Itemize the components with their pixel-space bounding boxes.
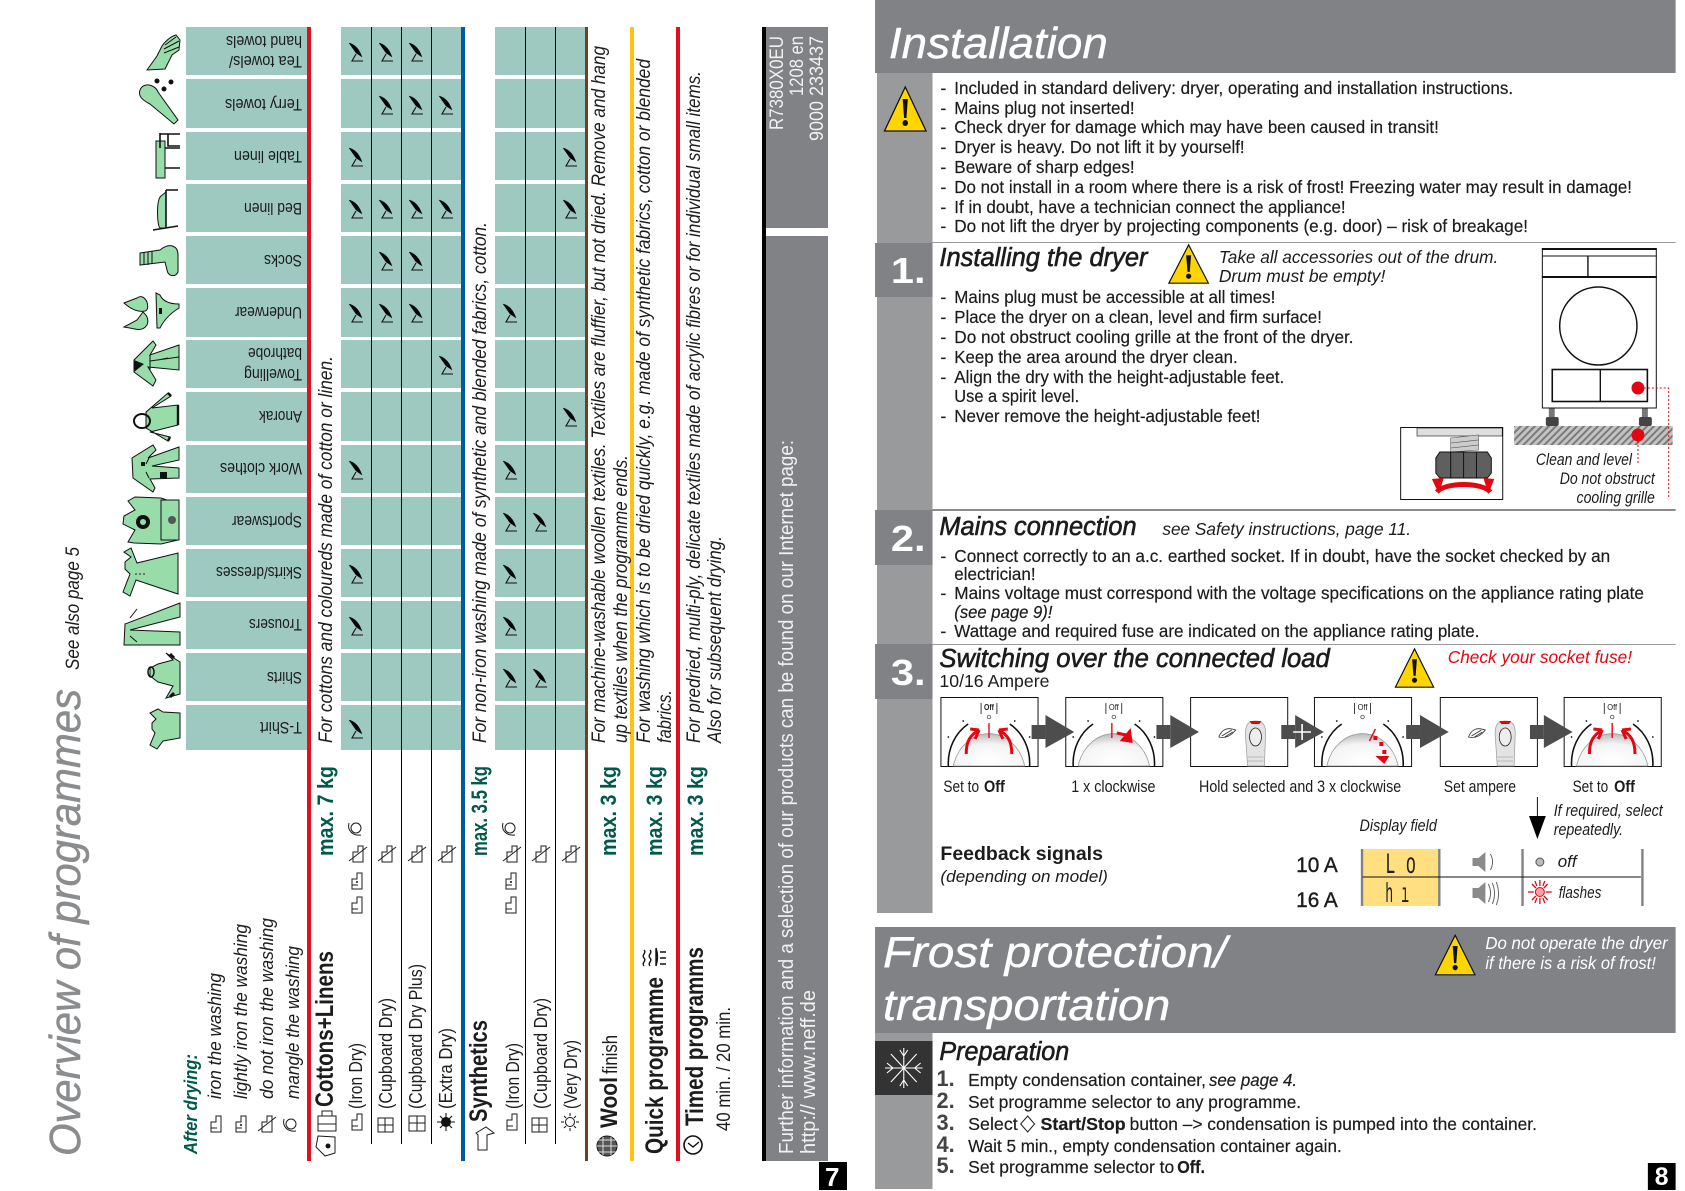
section 1: installing the dryer: Place the dryer on a clean, level and firm surface! bbox=[954, 307, 1322, 327]
heading: frost protection / transportation: transportation bbox=[883, 981, 1170, 1030]
step 3: hold selected bbox=[1191, 698, 1288, 766]
sidebar: grey margin strips bbox=[875, 73, 1676, 1189]
programme: wool finish: finish bbox=[600, 1035, 622, 1074]
section: preparation steps: Off. bbox=[1177, 1157, 1205, 1177]
list: general installation notes: - bbox=[940, 117, 946, 137]
captions: step labels bbox=[943, 777, 1635, 796]
section 3: switching over the connected load: Switching over the connected load bbox=[939, 645, 1331, 673]
section 2: mains connection: 2. bbox=[891, 519, 926, 559]
section 2: mains connection: see Safety instructions, page 11. bbox=[1162, 519, 1411, 539]
icon: wool ball bbox=[597, 1136, 617, 1156]
step 2: one click clockwise: Off bbox=[1109, 703, 1120, 712]
table: fabric labels column: Bed linen bbox=[244, 199, 302, 218]
heading: installation bbox=[875, 0, 1676, 73]
list: general installation notes: If in doubt, have a technician connect the appliance! bbox=[954, 197, 1346, 217]
diagram: adjustable foot detail bbox=[1401, 428, 1503, 500]
section: preparation steps: see page 4. bbox=[1209, 1070, 1297, 1090]
icons: garment row pictograms bbox=[123, 35, 180, 749]
programme: synthetics: max. 3.5 kg bbox=[467, 766, 492, 856]
heading: frost protection / transportation bbox=[875, 927, 1676, 1033]
programme: wool finish bbox=[589, 46, 632, 1156]
page number 8: 8 bbox=[1655, 1163, 1669, 1191]
captions: step labels: Set ampere bbox=[1444, 777, 1516, 796]
programme: quick programme: fabrics. bbox=[655, 690, 676, 743]
programme: timed programms: Timed programms bbox=[681, 947, 709, 1126]
heading: frost protection / transportation: Frost protection/ bbox=[883, 928, 1231, 977]
list: general installation notes: - bbox=[940, 98, 946, 118]
table: fabric labels column: bathrobe bbox=[248, 344, 302, 363]
section: preparation steps: 3. bbox=[936, 1110, 955, 1135]
heading: installation: Installation bbox=[889, 19, 1108, 68]
icon: clock bbox=[684, 1136, 702, 1154]
programme: cottons and linens: Cottons+Linens bbox=[311, 951, 339, 1107]
arrow: if required, select repeatedly: If required, select bbox=[1554, 801, 1664, 820]
diagram labels: clean and level, cooling grille bbox=[1536, 450, 1656, 507]
panel: further information footer: http:// www.neff.de bbox=[798, 990, 820, 1154]
section 3: switching over the connected load: 10/16 Ampere bbox=[939, 671, 1049, 691]
programme: synthetics: (Iron Dry) bbox=[503, 1043, 523, 1109]
step 6: set to off bbox=[1564, 698, 1661, 766]
section 1: installing the dryer: Drum must be empty! bbox=[1219, 266, 1385, 286]
section 3: switching over the connected load bbox=[891, 645, 1632, 693]
captions: step labels: Set to bbox=[943, 777, 979, 796]
title: overview of programmes: Overview of programmes bbox=[41, 689, 90, 1156]
section 1: installing the dryer: 1. bbox=[891, 251, 926, 291]
list: general installation notes: - bbox=[940, 216, 946, 236]
section: preparation steps: 5. bbox=[936, 1153, 955, 1178]
captions: step labels: Hold selected and 3 x clockwise bbox=[1199, 777, 1401, 796]
programme: cottons and linens: (Extra Dry) bbox=[436, 1028, 456, 1109]
diagram labels: clean and level, cooling grille: Do not obstruct bbox=[1560, 469, 1656, 488]
section: preparation steps: 4. bbox=[936, 1132, 955, 1157]
table: cottons and linens checks bbox=[341, 27, 461, 1144]
indicator: off: off bbox=[1558, 852, 1579, 871]
section 3: switching over the connected load: 3. bbox=[891, 653, 926, 693]
table: fabric labels column: Anorak bbox=[259, 407, 302, 426]
list: general installation notes: - bbox=[940, 157, 946, 177]
section: preparation steps: Empty condensation container, bbox=[968, 1070, 1206, 1090]
legend: after drying: do not iron the washing bbox=[257, 918, 277, 1099]
heading: frost protection / transportation: Do not operate the dryer bbox=[1485, 933, 1669, 953]
arrows between step panels bbox=[1032, 715, 1573, 748]
section 1: installing the dryer: Never remove the height-adjustable feet! bbox=[954, 406, 1260, 426]
indicator: flashes bbox=[1528, 880, 1602, 904]
step 2: one click clockwise bbox=[1066, 698, 1163, 766]
programme: synthetics: Synthetics bbox=[465, 1020, 493, 1122]
section 2: mains connection: (see page 9)! bbox=[954, 602, 1052, 622]
programme: cottons and linens: (Cupboard Dry) bbox=[376, 998, 396, 1109]
programme: timed programms bbox=[681, 71, 735, 1154]
legend: after drying: mangle the washing bbox=[283, 946, 303, 1099]
list: general installation notes: Dryer is heavy. Do not lift it by yourself! bbox=[954, 137, 1245, 157]
section 1: installing the dryer: - bbox=[940, 406, 946, 426]
text: feedback signals: Feedback signals bbox=[940, 844, 1103, 865]
step 4: three clicks clockwise: Off bbox=[1358, 703, 1368, 712]
table: fabric labels column: Sportswear bbox=[232, 512, 302, 531]
list: general installation notes: - bbox=[940, 197, 946, 217]
step 1: set to off: Off bbox=[984, 703, 994, 712]
table: fabric labels column: Shirts bbox=[267, 668, 302, 687]
text: feedback signals: (depending on model) bbox=[940, 867, 1108, 886]
section 1: installing the dryer: Align the dry with the height-adjustable feet. bbox=[954, 367, 1284, 387]
panel: overview of programmes (left page) bbox=[41, 27, 847, 1191]
text: feedback signals bbox=[940, 844, 1108, 886]
diagram labels: clean and level, cooling grille: cooling grille bbox=[1577, 488, 1655, 507]
step 1: set to off bbox=[941, 698, 1038, 766]
list: general installation notes: Beware of sharp edges! bbox=[954, 157, 1135, 177]
indicator: flashes: flashes bbox=[1559, 883, 1602, 902]
legend: after drying bbox=[181, 918, 303, 1155]
captions: step labels: Off bbox=[984, 777, 1005, 796]
table: feedback signals display bbox=[1296, 816, 1642, 912]
section 3: switching over the connected load: Check your socket fuse! bbox=[1448, 647, 1632, 667]
section 1: installing the dryer: - bbox=[940, 287, 946, 307]
icon: quick steam bbox=[643, 948, 666, 966]
section 2: mains connection: electrician! bbox=[954, 564, 1036, 584]
icon: cottons basket bbox=[316, 1111, 336, 1156]
legend: after drying: After drying: bbox=[181, 1054, 201, 1155]
diagram: dryer front view bbox=[1514, 249, 1673, 498]
section: preparation steps: 2. bbox=[936, 1088, 955, 1113]
section: preparation steps bbox=[936, 1038, 1537, 1178]
programme: synthetics bbox=[465, 222, 581, 1150]
section 1: installing the dryer bbox=[891, 244, 1498, 426]
programme: wool finish: Wool bbox=[596, 1077, 623, 1128]
table: feedback signals display: 10 A bbox=[1296, 854, 1338, 877]
programme: timed programms: For predried, multi-ply, delicate textiles made of acrylic fibres or for individual small items. bbox=[684, 71, 705, 743]
programme: wool finish: max. 3 kg bbox=[596, 766, 621, 856]
section 1: installing the dryer: Take all accessories out of the drum. bbox=[1219, 247, 1498, 267]
section 2: mains connection: Mains voltage must correspond with the voltage specifications on the appliance rating plate bbox=[954, 583, 1644, 603]
diagram labels: clean and level, cooling grille: Clean and level bbox=[1536, 450, 1633, 469]
table: fabric labels column: Work clothes bbox=[220, 459, 302, 478]
list: general installation notes: Mains plug not inserted! bbox=[954, 98, 1135, 118]
icon: warning triangle bbox=[884, 87, 926, 131]
section 1: installing the dryer: Do not obstruct cooling grille at the front of the dryer. bbox=[954, 327, 1354, 347]
list: general installation notes: Included in standard delivery: dryer, operating and installation instructions. bbox=[954, 78, 1513, 98]
captions: step labels: Set to bbox=[1573, 777, 1608, 796]
table: fabric labels column: Trousers bbox=[249, 615, 302, 634]
table: fabric labels column: Underwear bbox=[235, 303, 302, 322]
table: fabric labels column: hand towels bbox=[226, 32, 302, 51]
section 2: mains connection: - bbox=[940, 621, 946, 641]
legend: after drying: lightly iron the washing bbox=[231, 924, 251, 1099]
panel: further information footer bbox=[762, 27, 828, 1161]
section: preparation steps: Set programme selector to any programme. bbox=[968, 1092, 1301, 1112]
table: fabric labels column: T-Shirt bbox=[260, 718, 302, 737]
step panels: dial sequence bbox=[941, 698, 1661, 766]
icon: synthetics shirt bbox=[476, 1127, 494, 1150]
list: general installation notes: Do not install in a room where there is a risk of frost! Freezing water may result in damage! bbox=[954, 177, 1632, 197]
icon: snowflake bbox=[875, 1041, 933, 1095]
arrow: if required, select repeatedly: repeatedly. bbox=[1554, 820, 1623, 839]
panel: further information footer: Further information and a selection of our products can be found on our Internet page: bbox=[776, 440, 798, 1154]
table: feedback signals display: Display field bbox=[1360, 816, 1437, 835]
programme: timed programms: max. 3 kg bbox=[683, 766, 708, 856]
section 2: mains connection: - bbox=[940, 583, 946, 603]
programme: timed programms: 40 min. / 20 min. bbox=[714, 1007, 735, 1131]
panel: further information footer: 9000 233437 bbox=[807, 36, 828, 141]
captions: step labels: 1 x clockwise bbox=[1071, 777, 1155, 796]
section: preparation steps: Select bbox=[968, 1114, 1018, 1134]
icon: speaker single tone bbox=[1472, 852, 1493, 872]
list: general installation notes: - bbox=[940, 177, 946, 197]
section 1: installing the dryer: - bbox=[940, 327, 946, 347]
section 2: mains connection: Mains connection bbox=[939, 513, 1137, 541]
table: fabric labels column: Terry towels bbox=[225, 95, 302, 114]
programme: cottons and linens: For cottons and coloureds made of cotton or linen. bbox=[316, 356, 337, 743]
programme: quick programme bbox=[634, 58, 676, 1154]
section 1: installing the dryer: Mains plug must be accessible at all times! bbox=[954, 287, 1275, 307]
panel: further information footer: R7380X0EU bbox=[767, 36, 788, 130]
panel: installation (right page) bbox=[875, 0, 1676, 1191]
list: general installation notes bbox=[940, 78, 1632, 236]
panel: further information footer: 1208 en bbox=[787, 36, 808, 96]
section 2: mains connection: Connect correctly to an a.c. earthed socket. If in doubt, have the socket checked by an bbox=[954, 546, 1610, 566]
programme: quick programme: For washing which is to be dried quickly, e.g. made of synthetic fabrics, cotton or blended bbox=[634, 58, 655, 743]
programme: timed programms: Also for subsequent drying. bbox=[705, 536, 726, 744]
table: feedback signals display: L o bbox=[1385, 848, 1416, 882]
page number 7 bbox=[819, 1162, 847, 1191]
programme: synthetics: (Cupboard Dry) bbox=[531, 998, 551, 1109]
list: general installation notes: - bbox=[940, 78, 946, 98]
captions: step labels: Off bbox=[1614, 777, 1635, 796]
programme: synthetics: For non-iron washing made of synthetic and blended fabrics, cotton. bbox=[470, 222, 491, 743]
table: feedback signals display: h ı bbox=[1385, 880, 1409, 911]
programme: synthetics: (Very Dry) bbox=[561, 1040, 581, 1109]
legend: after drying: iron the washing bbox=[205, 973, 225, 1099]
section 1: installing the dryer: Keep the area around the dryer clean. bbox=[954, 347, 1238, 367]
dividers: programme colour bars bbox=[307, 27, 680, 1161]
section 1: installing the dryer: - bbox=[940, 367, 946, 387]
step 5: set ampere bbox=[1440, 698, 1537, 766]
section 1: installing the dryer: Use a spirit level. bbox=[954, 386, 1079, 406]
programme: quick programme: max. 3 kg bbox=[642, 766, 667, 856]
section: preparation steps: Preparation bbox=[939, 1038, 1069, 1066]
section: preparation steps: Start/Stop bbox=[1041, 1114, 1126, 1134]
table: fabric labels column: Socks bbox=[264, 251, 302, 270]
table: fabric labels column: Table linen bbox=[234, 147, 302, 166]
table: fabric labels column: Skirts/dresses bbox=[216, 563, 302, 582]
section: preparation steps: Wait 5 min., empty condensation container again. bbox=[968, 1136, 1342, 1156]
programme: cottons and linens: (Cupboard Dry Plus) bbox=[406, 964, 426, 1109]
section 1: installing the dryer: - bbox=[940, 347, 946, 367]
table: fabric labels column bbox=[186, 27, 307, 750]
list: general installation notes: Do not lift the dryer by projecting components (e.g. door) – risk of breakage! bbox=[954, 216, 1528, 236]
table: fabric labels column: Towelling bbox=[244, 365, 302, 384]
section: preparation steps: button –> condensation is pumped into the container. bbox=[1130, 1114, 1537, 1134]
step 6: set to off: Off bbox=[1607, 703, 1618, 712]
table: synthetics checks bbox=[495, 27, 585, 1144]
programme: cottons and linens: (Iron Dry) bbox=[346, 1043, 366, 1109]
arrow: if required, select repeatedly bbox=[1529, 797, 1664, 839]
programme: cottons and linens bbox=[311, 356, 456, 1156]
page number 8 bbox=[1648, 1163, 1676, 1191]
table: fabric labels column: Tea towels/ bbox=[229, 52, 302, 71]
list: general installation notes: Check dryer for damage which may have been caused in transit! bbox=[954, 117, 1439, 137]
list: general installation notes: - bbox=[940, 137, 946, 157]
section 2: mains connection bbox=[891, 513, 1644, 641]
section 2: mains connection: - bbox=[940, 546, 946, 566]
heading: frost protection / transportation: if there is a risk of frost! bbox=[1485, 953, 1656, 973]
section 1: installing the dryer: - bbox=[940, 307, 946, 327]
programme: cottons and linens: max. 7 kg bbox=[313, 766, 338, 856]
programme: wool finish: up textiles when the programme ends. bbox=[611, 455, 632, 743]
icon: speaker multiple tones bbox=[1472, 882, 1499, 905]
subtitle: see also page 5: See also page 5 bbox=[63, 547, 84, 670]
section 2: mains connection: Wattage and required fuse are indicated on the appliance rating plate. bbox=[954, 621, 1479, 641]
section: preparation steps: 1. bbox=[936, 1066, 955, 1091]
programme: quick programme: Quick programme bbox=[641, 977, 669, 1154]
table: feedback signals display: 16 A bbox=[1296, 889, 1338, 912]
section 1: installing the dryer: Installing the dryer bbox=[939, 244, 1149, 272]
indicator: off bbox=[1536, 852, 1579, 871]
step 4: three clicks clockwise bbox=[1314, 698, 1412, 766]
section: preparation steps: Set programme selector to bbox=[968, 1157, 1174, 1177]
